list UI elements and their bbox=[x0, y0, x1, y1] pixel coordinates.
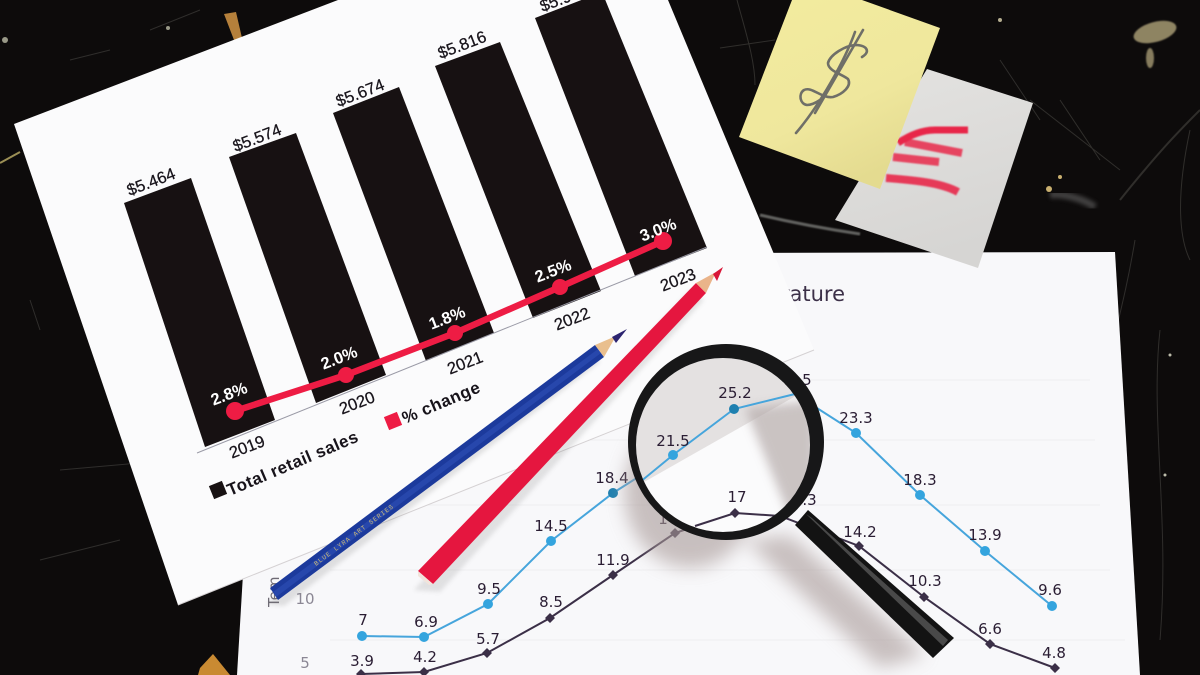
bar value labels: $5.464 bbox=[124, 165, 178, 200]
dark temperature series: 17 bbox=[727, 488, 747, 506]
legend bbox=[209, 378, 483, 500]
year labels: 2020 bbox=[337, 388, 378, 418]
legend: % change bbox=[399, 378, 483, 428]
icon: red marker strokes bbox=[886, 130, 968, 192]
blue temperature series: 13.9 bbox=[968, 526, 1002, 544]
legend: Total retail sales bbox=[224, 427, 361, 500]
blue temperature series: 9.5 bbox=[477, 580, 501, 598]
table chip marks bbox=[1131, 17, 1179, 68]
y axis labels: 10 bbox=[295, 590, 315, 608]
year labels: 2021 bbox=[445, 348, 486, 378]
dark temperature series: 5.7 bbox=[476, 630, 500, 648]
lens: 17 bbox=[727, 488, 747, 506]
dark temperature series: 10.3 bbox=[908, 572, 942, 590]
percent change line bbox=[226, 232, 672, 420]
y axis labels: Tem bbox=[265, 577, 283, 608]
dark temperature series: 16.3 bbox=[783, 491, 817, 509]
lens bbox=[636, 358, 810, 532]
percent labels: 1.8% bbox=[426, 303, 468, 333]
lens: 25.2 bbox=[718, 384, 752, 402]
blue temperature series: 7 bbox=[358, 611, 368, 629]
blue temperature series: 18.3 bbox=[903, 471, 937, 489]
dark temperature series: 14.2 bbox=[658, 510, 692, 528]
panel: retail sales bar chart paper bbox=[14, 0, 814, 605]
red pencil bbox=[414, 267, 723, 592]
percent labels: 2.0% bbox=[318, 343, 360, 373]
percent labels: 2.5% bbox=[532, 256, 574, 286]
bar value labels: $5.674 bbox=[333, 76, 387, 111]
yellow sticky note with dollar sign bbox=[739, 0, 940, 189]
blue temperature series: 6.9 bbox=[414, 613, 438, 631]
blue pencil bbox=[266, 329, 627, 606]
y axis labels bbox=[265, 577, 315, 672]
blue temperature series: 9.6 bbox=[1038, 581, 1062, 599]
blue temperature series: 25.5 bbox=[778, 371, 812, 389]
bar value labels bbox=[124, 0, 591, 200]
year labels: 2022 bbox=[552, 304, 593, 334]
dark temperature series bbox=[350, 488, 1066, 675]
magnifier cast shadow bbox=[624, 416, 925, 668]
dark temperature series: 8.5 bbox=[539, 593, 563, 611]
blue temperature series: 18.4 bbox=[595, 469, 629, 487]
year labels: 2023 bbox=[658, 265, 699, 295]
chart axis line bbox=[197, 247, 707, 453]
magnifying glass bbox=[624, 344, 954, 668]
icon: hand-drawn dollar sign bbox=[796, 30, 867, 133]
dark temperature series: 11.9 bbox=[596, 551, 630, 569]
handle bbox=[795, 510, 954, 658]
y axis labels: 5 bbox=[300, 654, 310, 672]
percent labels: 2.8% bbox=[208, 379, 250, 409]
blue temperature series: 21.5 bbox=[656, 432, 690, 450]
percent labels: 3.0% bbox=[637, 215, 679, 245]
bar value labels: $5.816 bbox=[435, 28, 489, 63]
year labels bbox=[227, 265, 699, 462]
dark temperature series: 6.6 bbox=[978, 620, 1002, 638]
rim bbox=[628, 344, 824, 540]
bar chart columns bbox=[124, 0, 707, 447]
chart title: Temperature bbox=[711, 282, 845, 306]
grey sticky note with red marks bbox=[835, 69, 1033, 268]
percent labels bbox=[208, 215, 679, 409]
lens: 21.5 bbox=[656, 432, 690, 450]
dark temperature series: 4.8 bbox=[1042, 644, 1066, 662]
blue temperature series: 25.2 bbox=[718, 384, 752, 402]
bar value labels: $5.574 bbox=[230, 121, 284, 156]
dark temperature series: 14.2 bbox=[843, 523, 877, 541]
panel: temperature line chart paper bbox=[237, 252, 1140, 675]
year labels: 2019 bbox=[227, 432, 268, 462]
dark temperature series: 4.2 bbox=[413, 648, 437, 666]
blue temperature series bbox=[357, 371, 1062, 642]
blue temperature series: 23.3 bbox=[839, 409, 873, 427]
dark temperature series: 3.9 bbox=[350, 652, 374, 670]
blue temperature series: 14.5 bbox=[534, 517, 568, 535]
pencil lettering: BLUE LYRA ART SERIES bbox=[313, 503, 395, 568]
